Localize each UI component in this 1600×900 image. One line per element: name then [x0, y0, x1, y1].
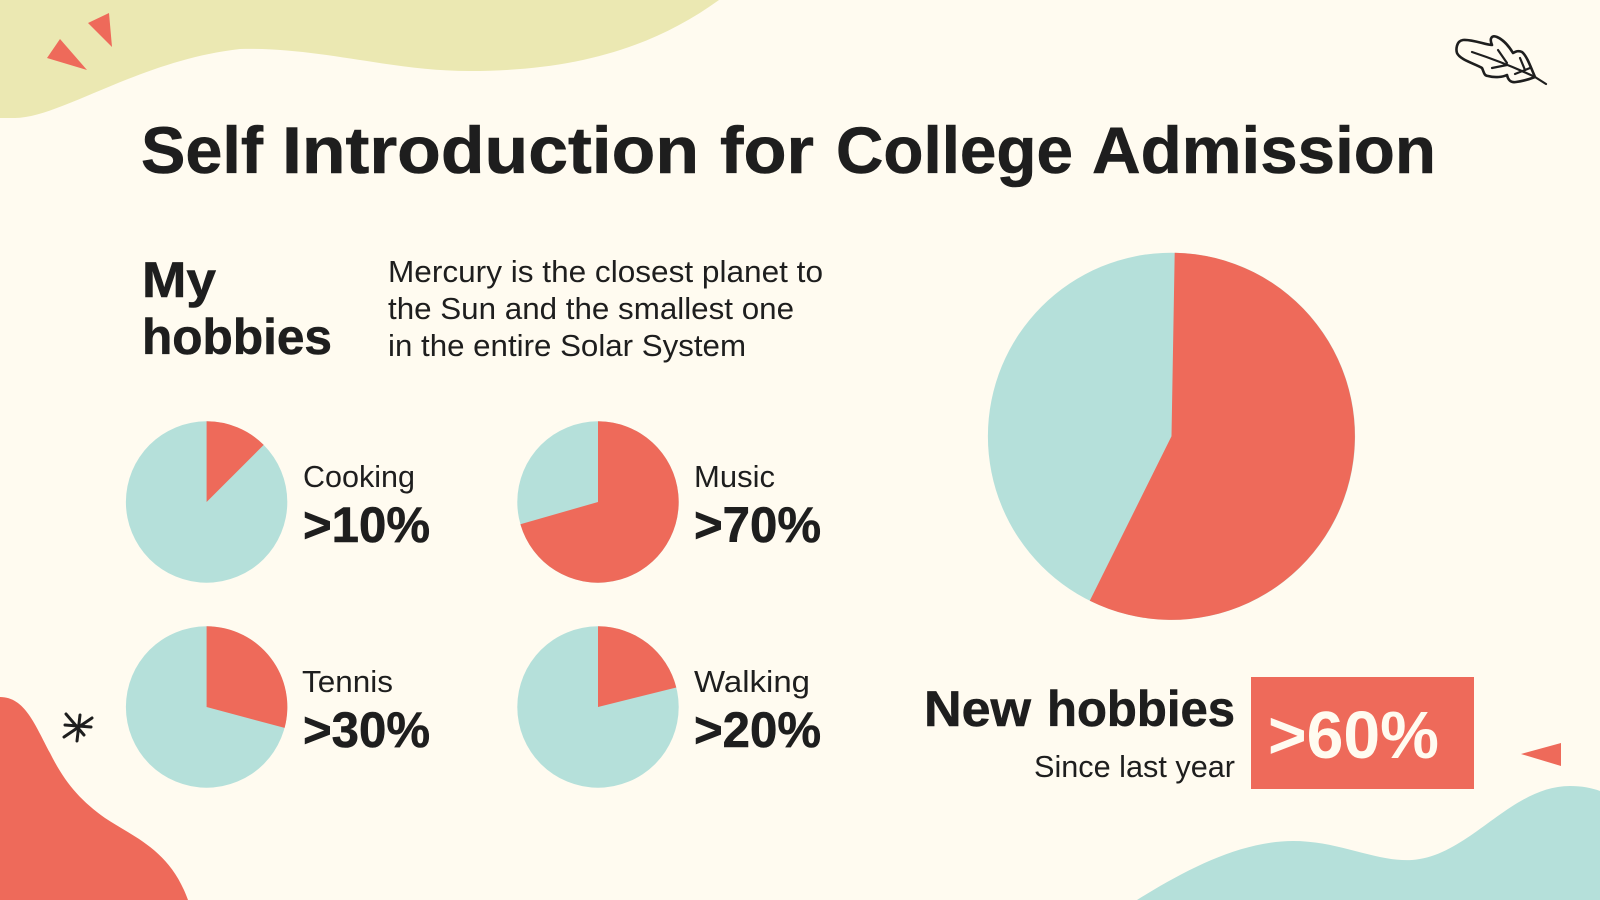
text block: mercury description: the Sun and the smallest one	[388, 291, 794, 326]
value: cooking: >10%	[303, 497, 430, 553]
blob: teal bottom-right	[1137, 786, 1600, 900]
pie chart: cooking 10%	[126, 421, 287, 583]
icon: asterisk	[64, 714, 92, 741]
heading: my hobbies	[142, 252, 332, 365]
value: walking: >20%	[694, 702, 821, 758]
label: cooking: Cooking	[303, 459, 415, 494]
icon: red triangle top-left upper	[88, 13, 112, 47]
title: Self	[141, 113, 264, 187]
heading: new hobbies: New	[924, 681, 1031, 737]
heading: my hobbies: My	[142, 252, 216, 308]
icon: red triangle top-left lower	[47, 39, 87, 70]
title: Admission	[1092, 113, 1436, 187]
icon: leaf	[1457, 36, 1546, 84]
title: for	[720, 113, 814, 187]
blob: red bottom-left	[0, 697, 188, 900]
pie chart: walking 20%	[517, 626, 679, 788]
callout: 60% box	[1251, 677, 1474, 789]
text block: mercury description: Mercury is the closest planet to	[388, 254, 823, 289]
pie chart: music 70%	[517, 421, 679, 583]
value: music: >70%	[694, 497, 821, 553]
callout: 60% box: >60%	[1268, 698, 1439, 773]
heading: new hobbies	[924, 681, 1235, 737]
pie chart: large new hobbies	[988, 253, 1355, 620]
title: Introduction	[282, 113, 699, 187]
panel: walking	[517, 626, 821, 788]
text block: mercury description	[388, 254, 823, 363]
panel: cooking	[126, 421, 430, 583]
label: tennis: Tennis	[302, 664, 393, 699]
icon: red triangle right	[1521, 743, 1561, 766]
text block: mercury description: in the entire Solar System	[388, 328, 746, 363]
title: College	[836, 113, 1073, 187]
panel: tennis	[126, 626, 430, 788]
text: since last year: Since last year	[1034, 749, 1235, 784]
label: music: Music	[694, 459, 775, 494]
pie chart: tennis 30%	[126, 626, 287, 788]
panel: music	[517, 421, 821, 583]
label: walking: Walking	[694, 664, 810, 699]
value: tennis: >30%	[303, 702, 430, 758]
heading: my hobbies: hobbies	[142, 309, 332, 365]
title	[141, 113, 1436, 187]
blob: yellow top-left	[0, 0, 719, 118]
heading: new hobbies: hobbies	[1047, 681, 1235, 737]
